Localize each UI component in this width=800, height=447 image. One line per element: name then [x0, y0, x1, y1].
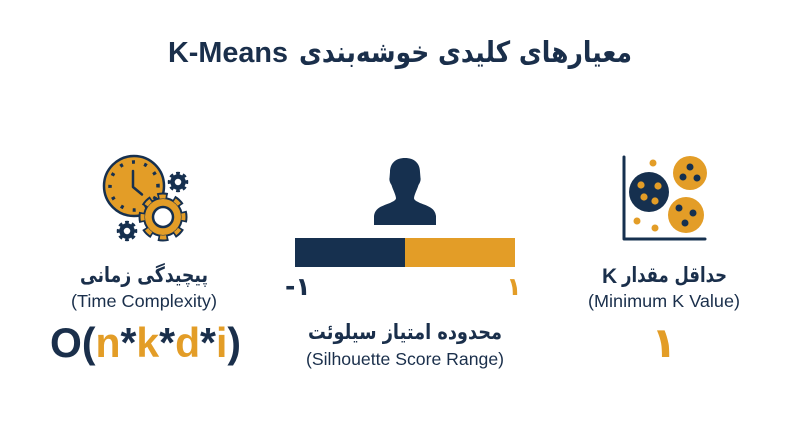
heading: silhouette persian: محدوده امتیاز سیلوئت — [308, 320, 502, 344]
title: معیارهای کلیدی خوشه‌بندی — [299, 35, 632, 69]
heading: minimum k persian — [602, 263, 727, 288]
title — [168, 35, 632, 69]
heading: minimum k persian: حداقل مقدار — [621, 263, 727, 287]
label: one: ۱ — [506, 272, 522, 301]
icon: cluster scatter plot — [624, 156, 707, 239]
icon: person silhouette — [374, 158, 436, 225]
text: time complexity english: (Time Complexity) — [71, 291, 217, 311]
heading: time complexity persian: پیچیدگی زمانی — [80, 262, 208, 287]
value: minimum k: ۱ — [651, 318, 677, 367]
panel: time complexity — [50, 156, 241, 366]
text: silhouette english: (Silhouette Score Range) — [306, 349, 504, 369]
panel: minimum k value — [588, 156, 740, 367]
heading: minimum k persian: K — [602, 265, 617, 288]
icon: clock and gears — [104, 156, 186, 240]
label: minus one: -۱ — [285, 272, 311, 301]
title: K-Means — [168, 37, 288, 69]
panel: silhouette score range — [285, 158, 522, 369]
chart: score range bar — [295, 238, 515, 267]
value: complexity formula: O(n*k*d*i) — [50, 319, 241, 366]
text: minimum k english: (Minimum K Value) — [588, 291, 740, 311]
